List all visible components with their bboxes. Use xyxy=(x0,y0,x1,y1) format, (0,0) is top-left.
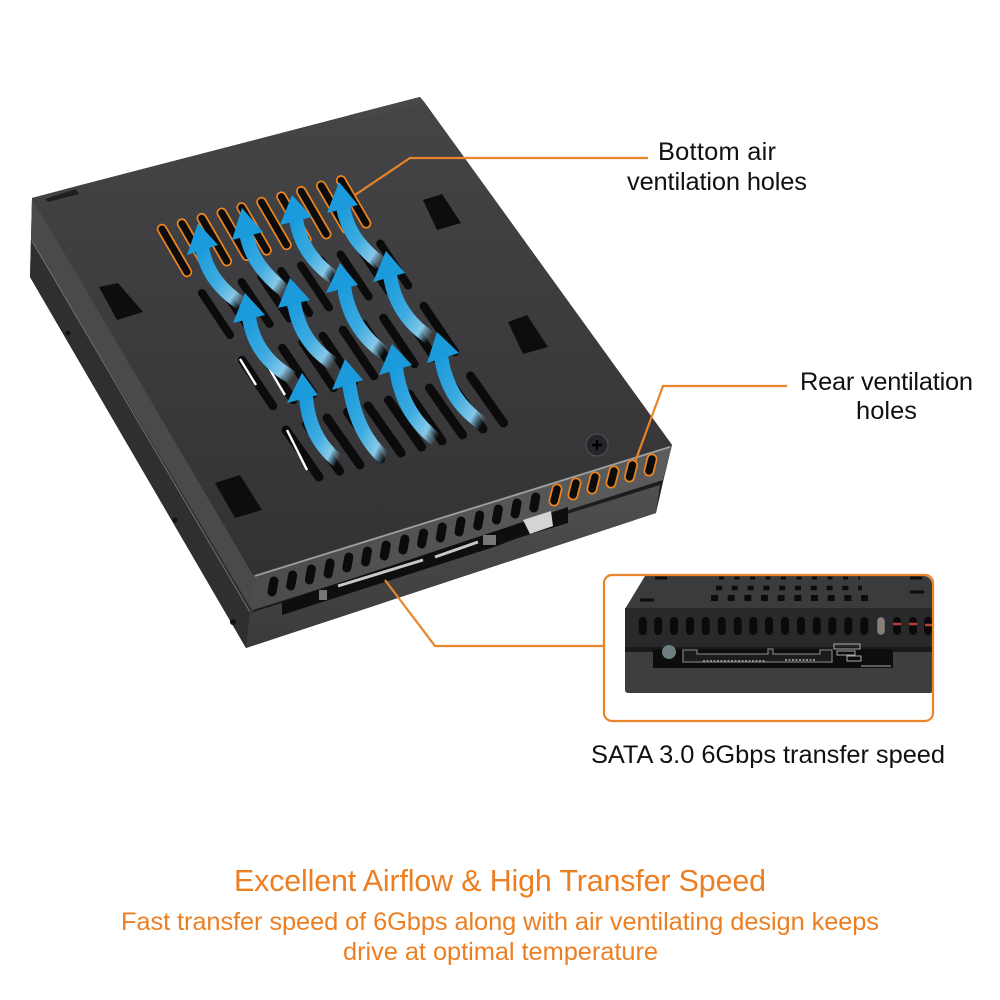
inset panel: SATA connector close-up xyxy=(604,575,933,721)
inset red tints xyxy=(893,624,933,625)
front upper panel xyxy=(253,445,672,610)
screw xyxy=(586,434,608,456)
arrow row 2 no. 1 xyxy=(233,293,293,378)
ventilation slots rows 2 to 4 xyxy=(202,244,504,477)
arrow row 1 no. 2 xyxy=(232,208,285,291)
label: bottom air ventilation holes: Bottom air xyxy=(658,138,777,166)
inset lit slot xyxy=(877,621,885,631)
callout line: rear ventilation xyxy=(635,386,787,462)
highlighted rear ventilation slots xyxy=(554,459,652,501)
inset SATA connector xyxy=(683,649,832,662)
inset contacts xyxy=(703,660,815,661)
label: rear ventilation holes xyxy=(800,368,973,425)
body text xyxy=(121,908,879,966)
inset device photo xyxy=(625,576,933,693)
left side upper band xyxy=(31,198,255,612)
front edge highlight xyxy=(255,447,670,576)
inset PCB markings xyxy=(834,644,891,666)
top tab right xyxy=(350,97,425,121)
label: bottom air ventilation holes xyxy=(627,138,807,196)
arrow row 3 no. 4 xyxy=(427,332,483,424)
connector clip right xyxy=(483,535,496,545)
body text: drive at optimal temperature xyxy=(343,938,658,966)
arrow row 3 no. 3 xyxy=(379,344,436,440)
heading: Excellent Airflow & High Transfer Speed xyxy=(234,864,766,898)
inset screw xyxy=(662,645,676,659)
inset top notches xyxy=(640,578,924,600)
inset front lower xyxy=(625,648,933,693)
arrow row 2 no. 2 xyxy=(278,278,334,364)
arrow row 1 no. 4 xyxy=(327,182,381,264)
left side lower band xyxy=(30,240,253,648)
body text: Fast transfer speed of 6Gbps along with air ventilating design keeps xyxy=(121,908,879,936)
callout line: SATA connector xyxy=(385,580,604,646)
connector clip left xyxy=(319,590,327,600)
inset top face xyxy=(625,576,933,609)
callout line: bottom air xyxy=(355,158,648,195)
arrow row 3 no. 2 xyxy=(332,359,385,459)
inset front upper xyxy=(625,608,933,648)
mounting notches xyxy=(99,194,548,518)
highlighted bottom air slots xyxy=(162,180,366,272)
inset connector recess xyxy=(653,649,893,668)
left side screw holes xyxy=(66,330,236,625)
label: rear ventilation holes: holes xyxy=(856,397,917,425)
front panel slots xyxy=(272,497,536,592)
white connector plug xyxy=(523,511,553,534)
white light through slots xyxy=(240,353,307,470)
drive enclosure xyxy=(30,97,672,648)
inset top vents xyxy=(711,578,868,598)
SATA power connector xyxy=(435,542,478,557)
top face xyxy=(32,97,672,575)
inset caption: SATA 3.0 6Gbps transfer speed xyxy=(591,741,945,769)
arrow row 1 no. 3 xyxy=(280,195,334,278)
arrow row 1 no. 1 xyxy=(187,223,242,304)
inset border xyxy=(604,575,933,721)
label: bottom air ventilation holes: ventilation holes xyxy=(627,168,807,196)
inset front slots xyxy=(643,621,928,631)
top tab left xyxy=(45,189,79,202)
label: rear ventilation holes: Rear ventilation xyxy=(800,368,973,396)
arrow row 3 no. 1 xyxy=(287,373,338,461)
front lower panel xyxy=(246,485,660,648)
left side seam xyxy=(32,241,250,612)
arrow row 2 no. 4 xyxy=(373,251,430,338)
airflow arrows xyxy=(187,182,483,461)
enclosure backing xyxy=(30,97,672,648)
inset seam xyxy=(625,647,933,652)
arrow row 2 no. 3 xyxy=(326,263,384,353)
SATA data connector xyxy=(338,560,423,586)
connector recess xyxy=(282,507,568,615)
